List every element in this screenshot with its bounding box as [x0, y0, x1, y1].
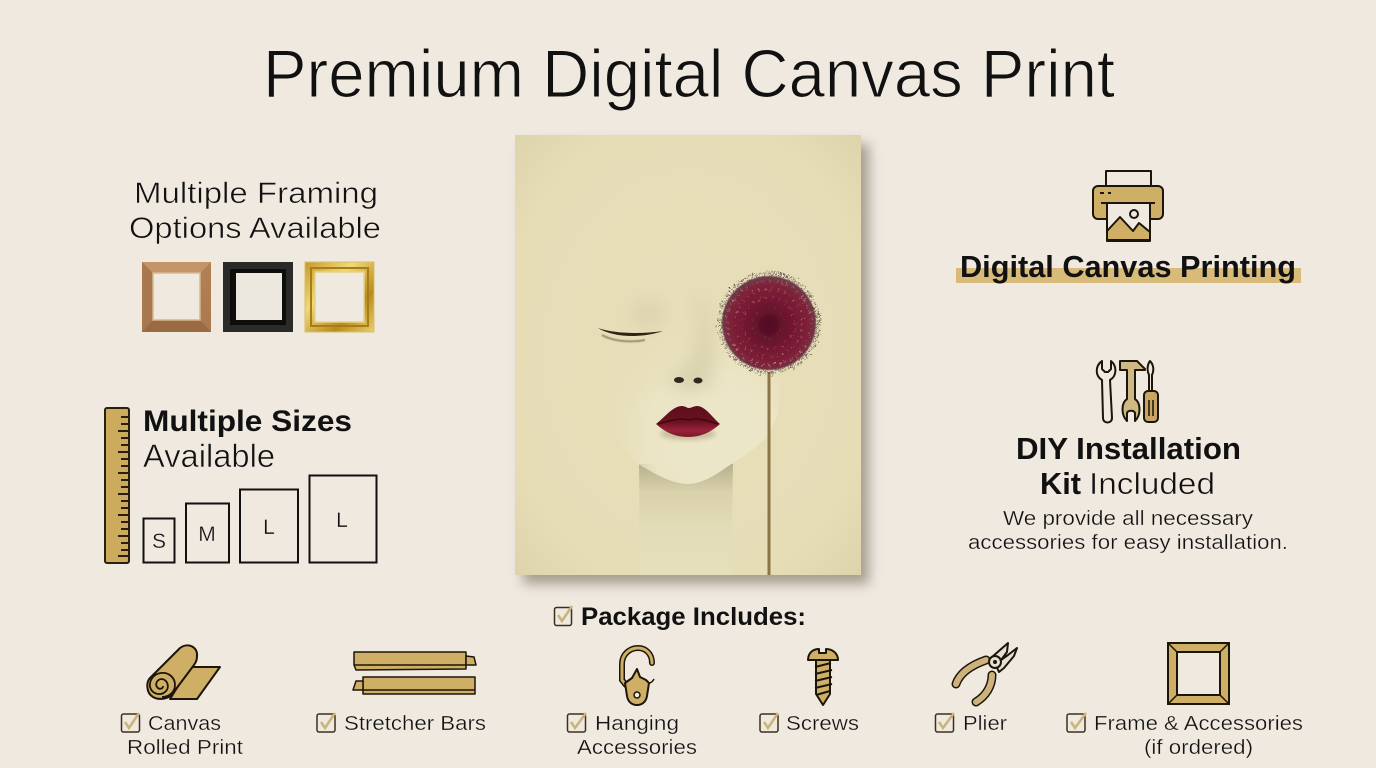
item check and label [1067, 713, 1303, 759]
panel: package includes [122, 603, 1303, 759]
text block: installation description: We provide all necessary [1003, 508, 1253, 530]
heading: multiple sizes: Available [143, 438, 275, 474]
icon: black frame [223, 262, 293, 332]
artwork: neck [639, 464, 733, 575]
item check and label: Frame & Accessories [1094, 713, 1303, 735]
artwork: lip shadow [660, 428, 716, 440]
heading: digital canvas printing: Digital Canvas Printing [960, 250, 1296, 284]
item: canvas rolled print [122, 645, 243, 759]
heading: framing options: Options Available [129, 212, 381, 245]
item check and label: Screws [786, 713, 859, 735]
panel: canvas artwork [515, 135, 869, 584]
heading: DIY installation kit: DIY Installation [1016, 432, 1241, 466]
item: hanging accessories [568, 648, 697, 759]
title: Premium Digital Canvas Print [263, 36, 1115, 112]
size box M [186, 504, 229, 562]
size box S [144, 518, 174, 562]
heading: framing options [129, 177, 381, 245]
item check and label: Canvas [148, 713, 221, 735]
panel: digital canvas printing [956, 171, 1301, 284]
icon: gold frame [305, 262, 374, 332]
size box M: M [198, 523, 216, 546]
icon: printer [1093, 171, 1163, 241]
icon: plier [956, 643, 1017, 702]
item check and label: Plier [963, 713, 1007, 735]
artwork: nostrils [674, 377, 702, 384]
artwork background [515, 135, 861, 575]
icon: canvas roll [147, 645, 220, 699]
size box large L: L [336, 509, 348, 532]
heading: framing options: Multiple Framing [134, 177, 378, 210]
artwork shadow [523, 144, 869, 584]
size box S: S [152, 530, 166, 553]
heading: DIY installation kit: Kit [1040, 467, 1081, 501]
text block: installation description: accessories for easy installation. [968, 532, 1288, 554]
item check and label: Hanging [595, 713, 679, 735]
artwork: closed eye [598, 328, 663, 341]
item check and label [568, 713, 697, 759]
heading: DIY installation kit: Included [1089, 466, 1215, 501]
heading highlight [956, 268, 1301, 283]
text block: installation description [968, 508, 1288, 554]
icon: tools [1097, 361, 1158, 422]
size box L: L [263, 516, 275, 539]
size box large L [310, 476, 376, 562]
panel: framing options [129, 177, 381, 332]
artwork: dandelion flower [720, 274, 818, 372]
artwork: face [594, 270, 780, 484]
artwork: eye socket shading [630, 300, 666, 328]
item: stretcher bars [317, 652, 486, 735]
item: frame and accessories [1067, 643, 1303, 759]
heading: DIY installation kit [1016, 432, 1241, 501]
artwork: nose shading [668, 295, 712, 390]
panel: DIY installation kit [968, 361, 1288, 554]
icon: screw [808, 649, 838, 705]
size box L [240, 490, 298, 562]
item check and label: Stretcher Bars [344, 713, 486, 735]
heading: multiple sizes [143, 405, 352, 474]
item: screws [760, 649, 859, 735]
item: plier [936, 643, 1017, 735]
icon: wood frame [1168, 643, 1229, 704]
item check and label: Accessories [577, 737, 697, 759]
heading: package includes: Package Includes: [581, 603, 806, 631]
icon: hanging hook [622, 648, 654, 705]
icon: ruler [105, 408, 129, 563]
icon: wood frame [142, 262, 211, 332]
icon: stretcher bars [353, 652, 476, 694]
artwork: dandelion stem [768, 372, 770, 575]
panel: multiple sizes [105, 405, 376, 563]
item check and label [122, 713, 243, 759]
item check and label: Rolled Print [127, 737, 243, 759]
heading: multiple sizes: Multiple Sizes [143, 405, 352, 438]
item check and label: (if ordered) [1144, 737, 1253, 759]
artwork: lips [656, 406, 720, 437]
